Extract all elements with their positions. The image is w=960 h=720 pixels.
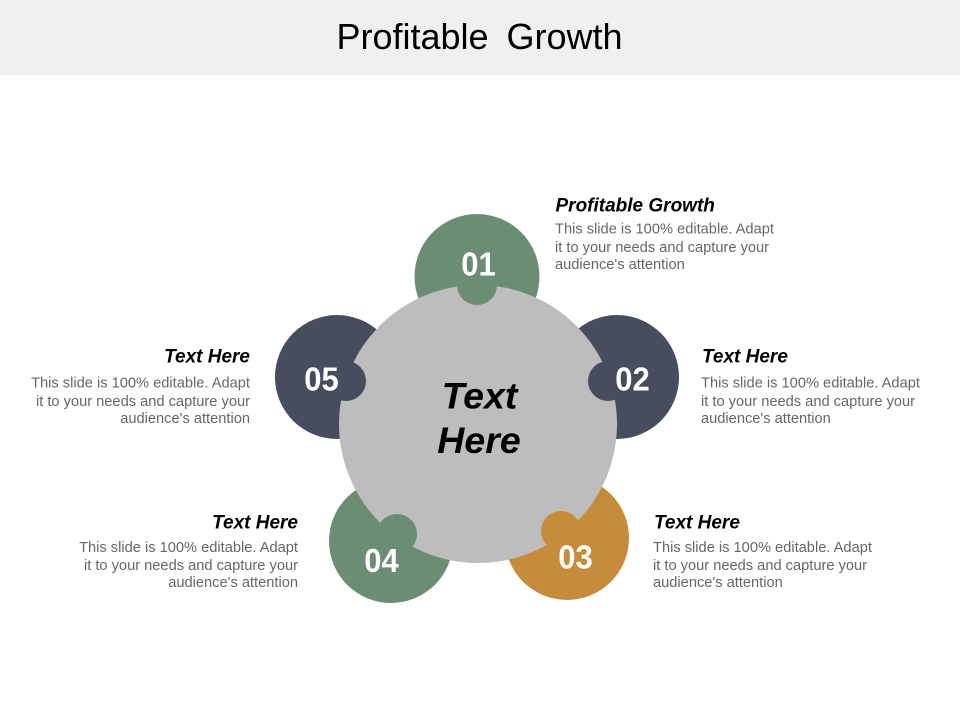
- text block 03: it to your needs and capture your: [653, 558, 867, 574]
- node circle 05: [275, 315, 399, 439]
- number 05: 05: [304, 360, 339, 398]
- central circle: [339, 285, 617, 563]
- text block 05: This slide is 100% editable. Adapt: [31, 376, 250, 392]
- connector knob 04: [377, 514, 417, 554]
- text block 04: Text Here: [212, 512, 298, 534]
- text block 02: This slide is 100% editable. Adapt: [701, 376, 920, 392]
- node circle 03: [505, 476, 629, 600]
- text block 05: Text Here: [164, 346, 250, 368]
- node circle 02: [555, 315, 679, 439]
- central label: [437, 374, 521, 461]
- number 03: 03: [558, 538, 593, 576]
- text block 02: audience's attention: [701, 411, 831, 427]
- text block 03: audience's attention: [653, 575, 783, 591]
- text block 01: [555, 196, 774, 273]
- text block 03: Text Here: [654, 512, 740, 534]
- node circle 01: [414, 214, 540, 339]
- text block 01: This slide is 100% editable. Adapt: [555, 222, 774, 238]
- number 02: 02: [615, 360, 650, 398]
- number 01: 01: [461, 246, 496, 282]
- text block 04: it to your needs and capture your: [84, 558, 298, 574]
- text block 01: it to your needs and capture your: [555, 240, 769, 256]
- text block 01: audience's attention: [555, 257, 685, 273]
- node circle 04: [329, 479, 453, 603]
- connector knob 01: [457, 265, 497, 305]
- text block 02: it to your needs and capture your: [701, 394, 915, 410]
- connector knob 02: [588, 361, 628, 401]
- title band: [0, 0, 960, 75]
- text block 04: This slide is 100% editable. Adapt: [79, 540, 298, 556]
- central label: Here: [437, 419, 521, 461]
- text block 03: [653, 512, 872, 591]
- text block 02: [701, 346, 920, 427]
- text block 04: audience's attention: [168, 575, 298, 591]
- text block 02: Text Here: [702, 346, 788, 368]
- connector knob 03: [541, 511, 581, 551]
- central label: Text: [442, 374, 519, 416]
- connector knob 05: [326, 361, 366, 401]
- text block 05: it to your needs and capture your: [36, 394, 250, 410]
- title: Profitable Growth: [336, 16, 623, 57]
- text block 01: Profitable Growth: [556, 196, 715, 216]
- number 04: 04: [364, 542, 399, 579]
- text block 05: audience's attention: [120, 411, 250, 427]
- text block 05: [31, 346, 250, 427]
- text block 04: [79, 512, 298, 591]
- text block 03: This slide is 100% editable. Adapt: [653, 540, 872, 556]
